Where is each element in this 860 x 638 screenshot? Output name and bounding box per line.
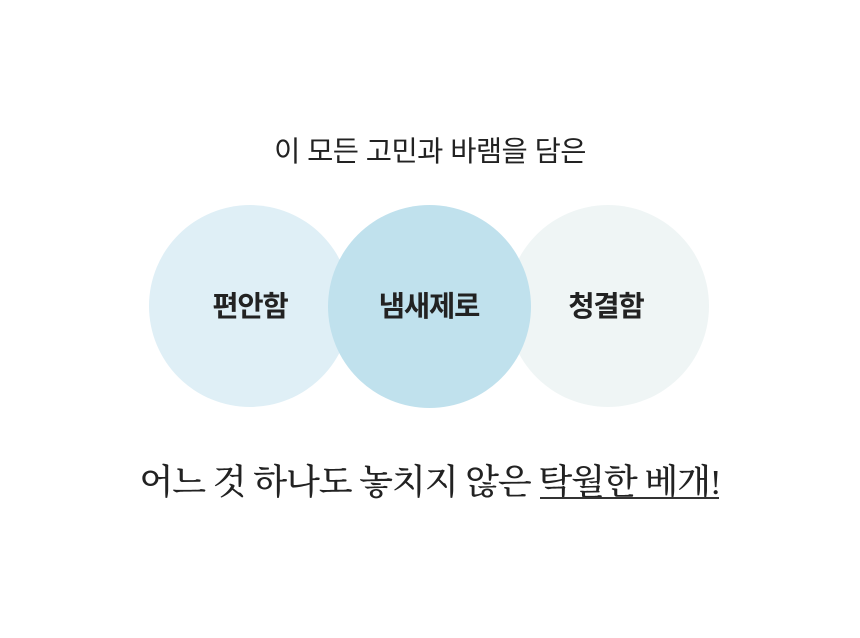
label: 냄새제로: 냄새제로 (379, 291, 479, 323)
heading: intro line: 이 모든 고민과 바램을 담은 (274, 136, 586, 168)
headline: closing statement: 어느 것 하나도 놓치지 않은 탁월한 베개! (140, 463, 720, 502)
circle: right 청결함 (507, 205, 709, 407)
underline: 탁월한 베개 (540, 497, 719, 499)
circle: center 냄새제로 (328, 205, 531, 408)
label: 청결함: 청결함 (568, 291, 644, 323)
label: 편안함: 편안함 (212, 291, 288, 323)
circle: left 편안함 (149, 205, 351, 407)
